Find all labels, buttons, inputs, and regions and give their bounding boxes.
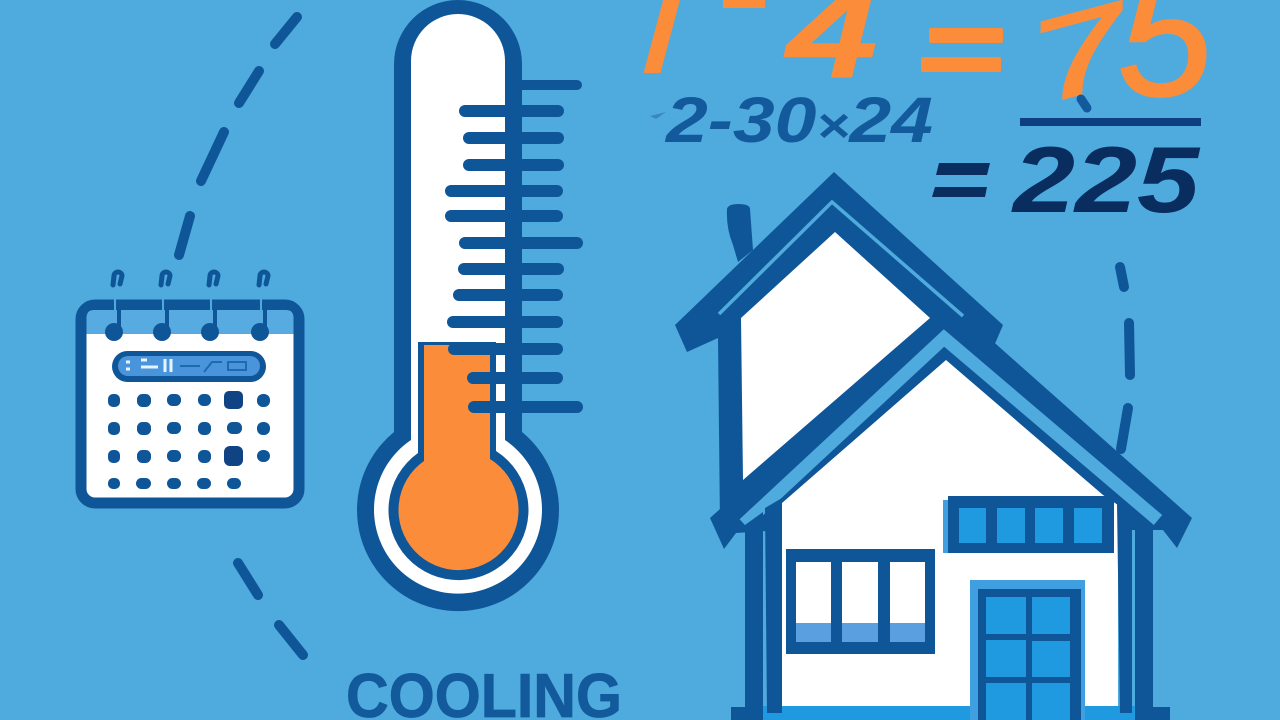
house upper gable [675, 172, 1003, 525]
house lower roof [710, 318, 1192, 549]
house upper window [943, 496, 1114, 553]
icon: thermometer [357, 0, 577, 611]
house chimney [727, 204, 753, 262]
house wall [782, 360, 1118, 706]
equation: blue multiplication line: 2-30 ×24 [665, 84, 933, 156]
dashed arc: calendar to thermometer top [179, 17, 297, 255]
illustration: house [675, 172, 1192, 720]
thermometer scale ticks [451, 85, 577, 407]
house ground strip [762, 706, 1136, 720]
dashed arc: calendar to cooling label [238, 563, 303, 655]
thermometer mercury [399, 345, 519, 570]
equation: fraction bar and total: 225 [1011, 127, 1201, 232]
equation: fraction bar and total [932, 99, 1201, 232]
dashed arc: equation to house [1120, 267, 1130, 449]
calendar month pill [112, 351, 266, 382]
equation: orange result line [644, 0, 1206, 100]
house lower window [786, 549, 935, 654]
house wall posts [731, 498, 1170, 720]
icon: calendar [81, 272, 299, 503]
calendar date grid [108, 391, 270, 489]
house door [970, 580, 1085, 720]
calendar binding rings [105, 272, 269, 341]
